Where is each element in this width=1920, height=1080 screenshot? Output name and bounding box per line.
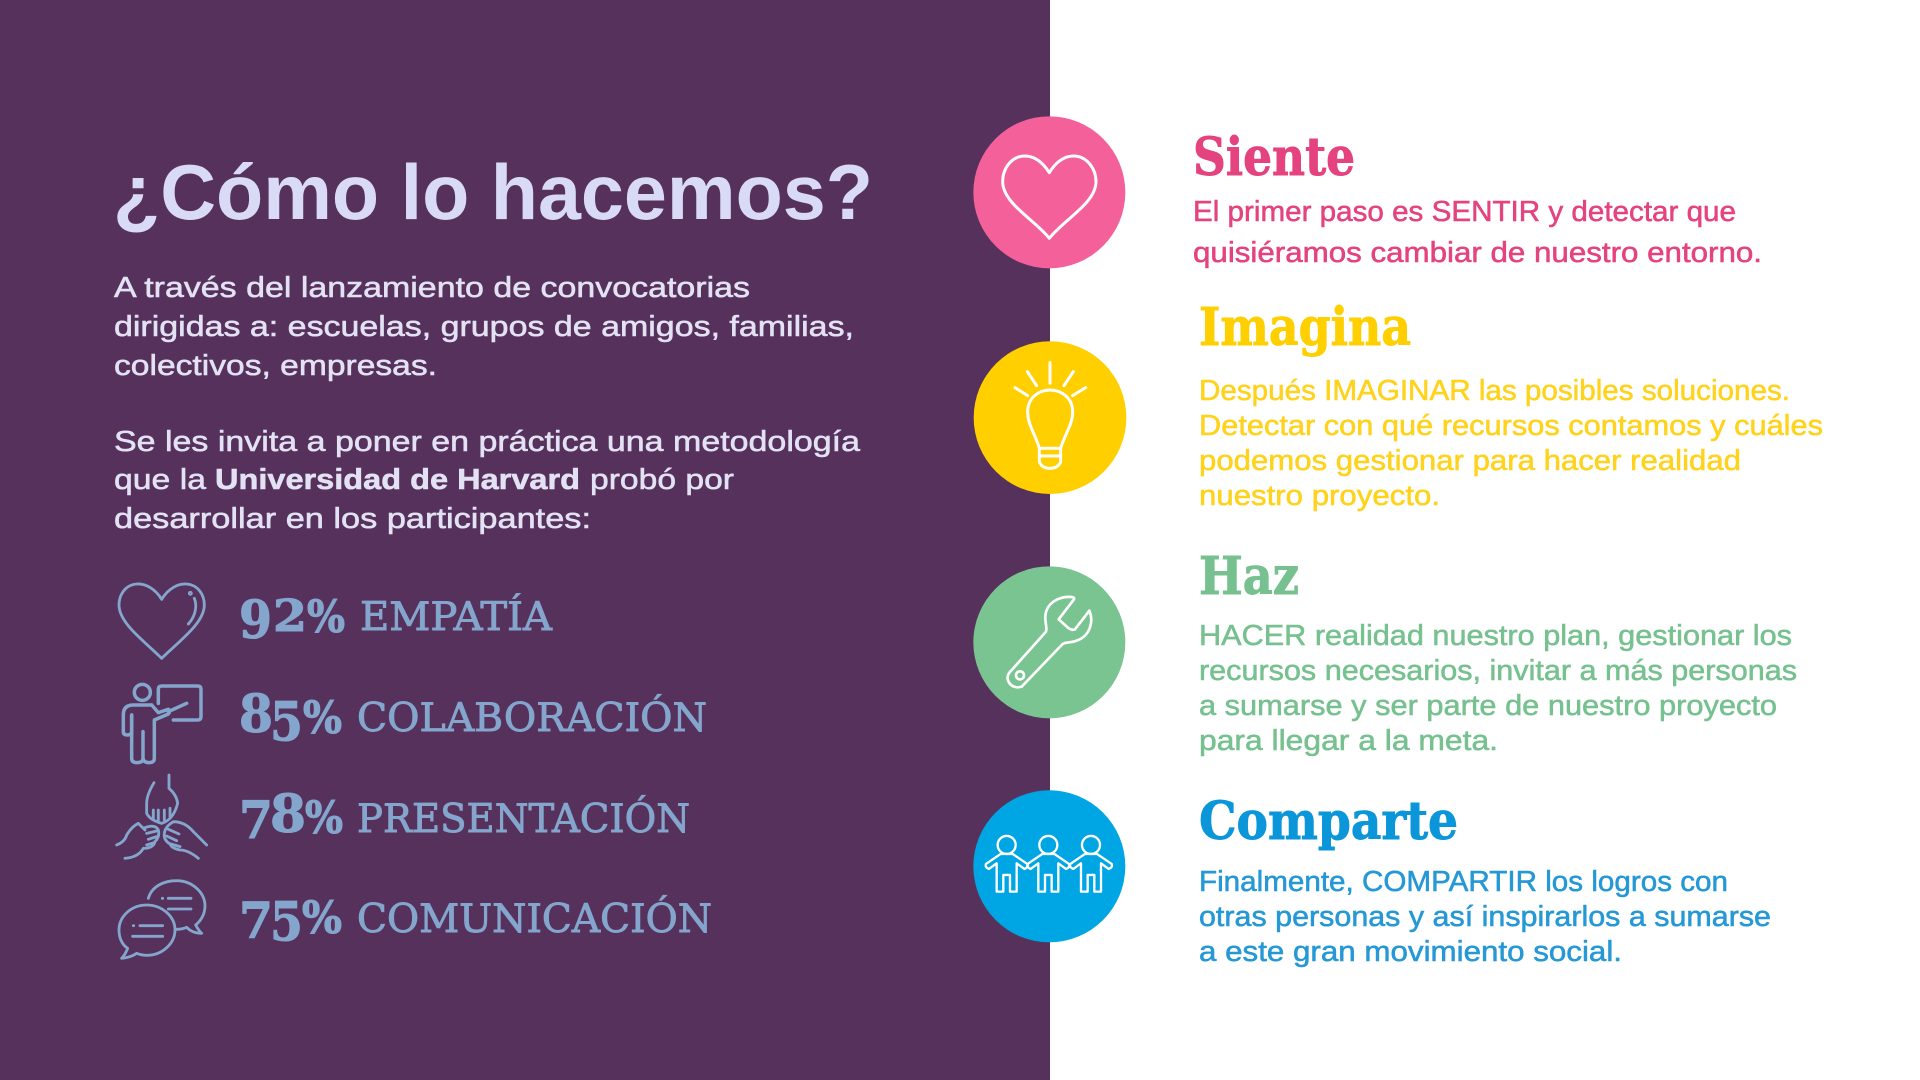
icon: speech bubbles bbox=[119, 881, 205, 958]
icon: joined hands bbox=[117, 775, 207, 858]
text block: methodology bbox=[114, 426, 861, 535]
text block: introduction bbox=[114, 272, 854, 382]
stat: presentation: 7 bbox=[239, 791, 273, 851]
stat: empathy bbox=[239, 590, 553, 651]
stat: communication bbox=[239, 891, 712, 953]
text block: Haz: HACER realidad nuestro plan, gestionar los bbox=[1199, 620, 1792, 652]
stat: collaboration: 8 bbox=[239, 684, 273, 745]
stat: collaboration bbox=[239, 684, 707, 753]
stat: collaboration: % bbox=[303, 693, 342, 744]
icon: presenter at board bbox=[123, 684, 201, 763]
icon: green wrench circle bbox=[973, 566, 1125, 718]
icon: yellow light bulb circle bbox=[974, 341, 1126, 494]
text block: introduction: colectivos, empresas. bbox=[114, 350, 437, 382]
text block: Haz: a sumarse y ser parte de nuestro proyecto bbox=[1199, 690, 1777, 722]
text block: Imagina bbox=[1199, 375, 1823, 512]
text block: Siente bbox=[1193, 196, 1762, 269]
text block: Siente: El primer paso es SENTIR y detectar que bbox=[1193, 196, 1736, 228]
stat: communication: 7 bbox=[239, 891, 273, 950]
stat: empathy: 9 bbox=[239, 590, 272, 651]
stat: empathy: 2 bbox=[273, 591, 307, 642]
title: ¿Cómo lo hacemos? bbox=[113, 148, 873, 236]
stat: presentation: PRESENTACIÓN bbox=[357, 795, 690, 842]
stat: empathy: EMPATÍA bbox=[360, 593, 553, 640]
text block: Comparte: a este gran movimiento social. bbox=[1199, 936, 1622, 968]
text block: methodology: desarrollar en los participantes: bbox=[114, 503, 591, 535]
text block: Imagina: nuestro proyecto. bbox=[1199, 480, 1440, 512]
text block: Haz: para llegar a la meta. bbox=[1199, 725, 1498, 757]
icon: outline heart bbox=[119, 584, 204, 658]
stat: presentation bbox=[239, 784, 690, 851]
heading: Haz: Haz bbox=[1199, 546, 1299, 607]
text block: Comparte bbox=[1199, 866, 1771, 968]
text block: Haz bbox=[1199, 620, 1797, 757]
stat: collaboration: 5 bbox=[270, 691, 303, 753]
stat: empathy: % bbox=[307, 592, 345, 643]
text block: methodology: Se les invita a poner en práctica una metodología bbox=[114, 426, 861, 458]
text block: Comparte: otras personas y así inspirarlos a sumarse bbox=[1199, 901, 1771, 933]
text block: Imagina: Detectar con qué recursos contamos y cuáles bbox=[1199, 410, 1823, 442]
stat: communication: COMUNICACIÓN bbox=[357, 895, 712, 942]
text block: Imagina: podemos gestionar para hacer realidad bbox=[1199, 445, 1741, 477]
text block: Siente: quisiéramos cambiar de nuestro entorno. bbox=[1193, 237, 1762, 269]
heading: Siente: Siente bbox=[1193, 127, 1355, 188]
stat: collaboration: COLABORACIÓN bbox=[357, 694, 707, 741]
icon: pink heart circle bbox=[973, 116, 1125, 268]
text block: introduction: A través del lanzamiento de convocatorias bbox=[114, 272, 750, 304]
icon: blue people circle bbox=[973, 790, 1125, 942]
stat: communication: % bbox=[302, 893, 342, 944]
text block: introduction: dirigidas a: escuelas, grupos de amigos, familias, bbox=[114, 311, 854, 343]
stat: presentation: % bbox=[305, 793, 343, 844]
stat: presentation: 8 bbox=[270, 784, 306, 845]
text block: Comparte: Finalmente, COMPARTIR los logros con bbox=[1199, 866, 1728, 898]
text block: Haz: recursos necesarios, invitar a más personas bbox=[1199, 655, 1797, 687]
text block: Imagina: Después IMAGINAR las posibles soluciones. bbox=[1199, 375, 1790, 407]
text block: methodology: que la bbox=[114, 464, 207, 496]
stat: communication: 5 bbox=[270, 891, 303, 953]
heading: Imagina: Imagina bbox=[1199, 297, 1411, 358]
heading: Comparte: Comparte bbox=[1199, 791, 1458, 852]
panel: purple background bbox=[0, 0, 1050, 1080]
text block: methodology: Universidad de Harvard bbox=[215, 464, 580, 496]
text block: methodology: probó por bbox=[590, 464, 734, 496]
